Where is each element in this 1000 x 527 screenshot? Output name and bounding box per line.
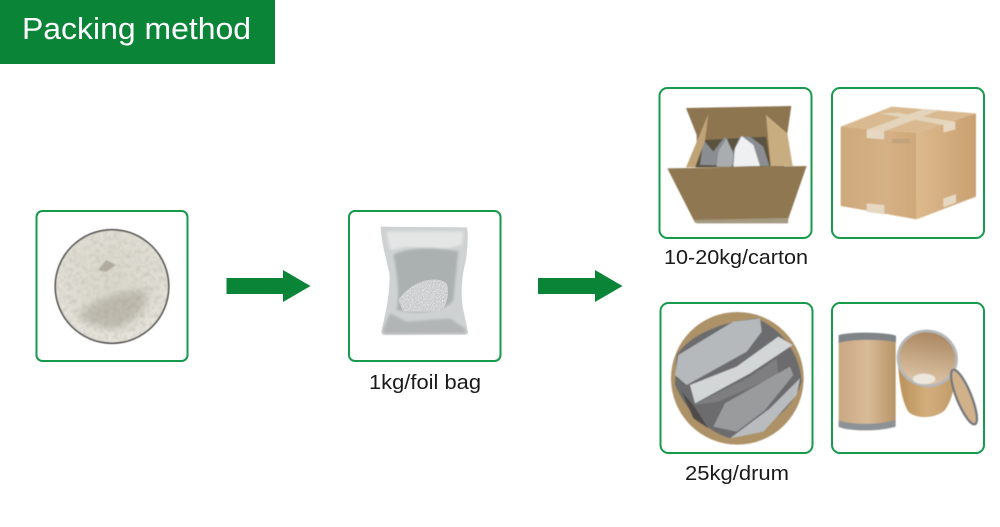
- caption: 1kg/foil bag: 1kg/foil bag: [369, 372, 481, 394]
- panel: open drum: [660, 303, 812, 485]
- arrow: powder to foil bag: [226, 270, 310, 302]
- panel: foil bag: [349, 211, 500, 394]
- arrow: foil bag to outer packaging: [538, 270, 622, 302]
- panel: open carton: [660, 88, 812, 269]
- header banner: [0, 0, 275, 64]
- image: drum with foil bags: [671, 312, 804, 445]
- panel: powder: [36, 211, 188, 361]
- panel: fibre drums: [832, 303, 984, 453]
- heading: Packing method: Packing method: [22, 11, 251, 46]
- panel: sealed carton: [832, 88, 984, 238]
- caption: 10-20kg/carton: 10-20kg/carton: [664, 247, 808, 269]
- image: powder in dish: [54, 229, 170, 344]
- image: sealed carton: [841, 107, 976, 219]
- image: fibre drums and lid: [839, 326, 982, 430]
- image: open carton with foil bags: [667, 106, 807, 223]
- image: foil bag: [381, 227, 468, 335]
- caption: 25kg/drum: 25kg/drum: [685, 463, 789, 485]
